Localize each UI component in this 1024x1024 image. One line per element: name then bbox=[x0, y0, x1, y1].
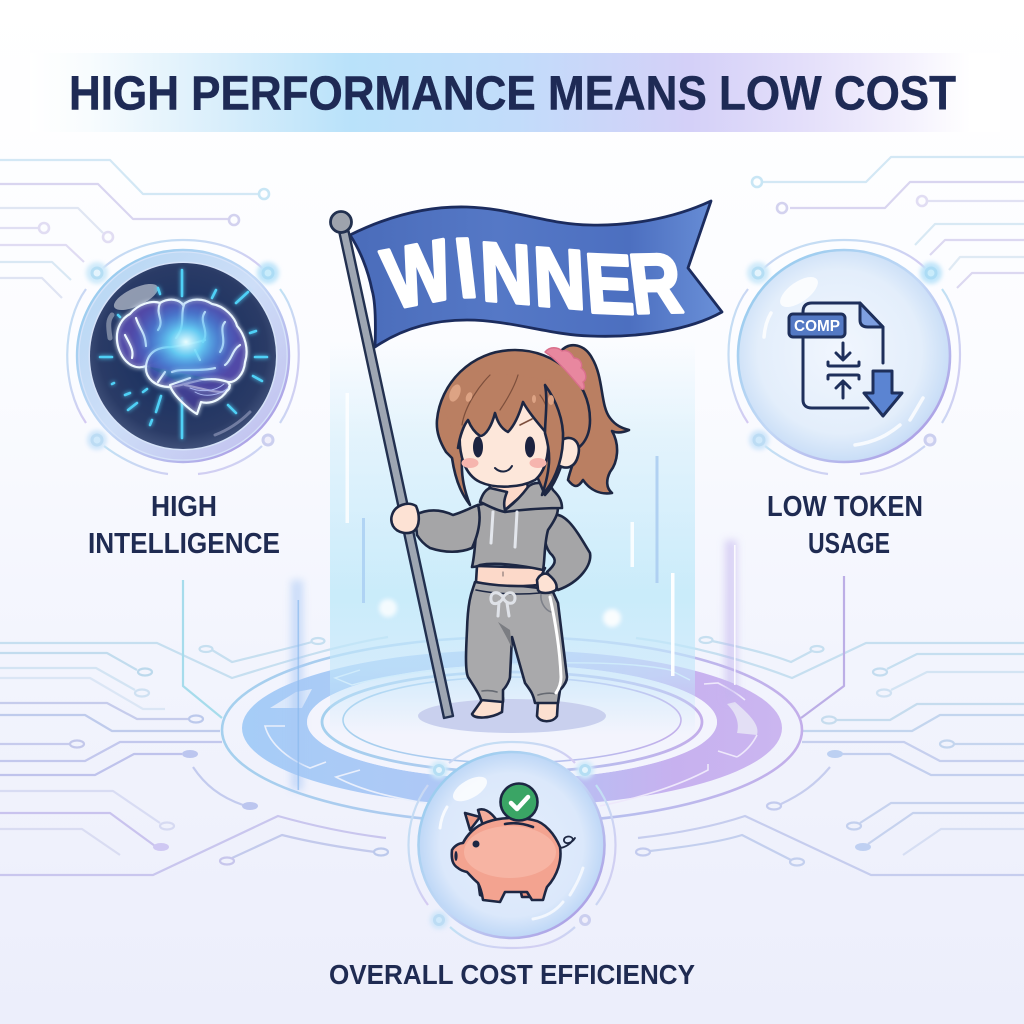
compress arrows bbox=[828, 343, 859, 398]
label: low token usage: LOW TOKEN bbox=[767, 491, 923, 523]
pig body bbox=[452, 818, 560, 902]
panel: low token usage bbox=[728, 240, 960, 474]
label: overall cost efficiency: OVERALL COST EFFICIENCY bbox=[329, 959, 695, 990]
connector nodes bbox=[86, 262, 279, 450]
nostril bbox=[454, 851, 458, 861]
brow bbox=[520, 419, 532, 425]
panel: high intelligence bbox=[67, 240, 299, 474]
bare midriff bbox=[476, 566, 545, 586]
coin slot bbox=[505, 823, 533, 827]
clenched hand bbox=[391, 504, 419, 533]
light column bbox=[330, 340, 695, 735]
circuit lines: top right bbox=[752, 157, 1024, 288]
sphere highlights bbox=[109, 279, 250, 435]
download arrow bbox=[864, 371, 902, 416]
ears bbox=[465, 813, 480, 830]
eyes bbox=[473, 436, 483, 458]
hair back bbox=[437, 350, 590, 505]
bubble highlights bbox=[440, 772, 583, 919]
blush bbox=[462, 458, 478, 468]
icon: energy rays bbox=[100, 270, 267, 438]
orbit arcs bbox=[728, 240, 960, 474]
glass rim bbox=[77, 250, 289, 462]
winner flag bbox=[330, 201, 722, 718]
hoodie torso bbox=[472, 500, 558, 570]
pole finial bbox=[330, 212, 352, 232]
hood bbox=[480, 483, 562, 512]
side lock bbox=[542, 385, 563, 495]
comp tag bbox=[789, 314, 845, 337]
title banner bbox=[30, 53, 1000, 132]
glass bubble bbox=[418, 752, 604, 938]
flag banner bbox=[350, 201, 722, 347]
navel bbox=[502, 572, 504, 576]
mouth bbox=[495, 466, 512, 472]
circuit lines: lower left bbox=[0, 580, 388, 875]
belly shading bbox=[464, 826, 556, 878]
sweatpants bbox=[466, 582, 567, 703]
dark sphere bbox=[90, 263, 276, 449]
face bbox=[460, 399, 548, 487]
right arm bbox=[544, 514, 590, 590]
icon: compressed file bbox=[789, 303, 902, 416]
glass bubble bbox=[738, 250, 950, 462]
circuit lines: top left bbox=[0, 160, 269, 298]
chibi girl character bbox=[391, 345, 629, 721]
title: HIGH PERFORMANCE MEANS LOW COST bbox=[69, 68, 956, 120]
icon: green check coin bbox=[500, 784, 538, 820]
connector nodes bbox=[430, 761, 594, 929]
connector nodes bbox=[747, 262, 942, 450]
hand on hip bbox=[537, 574, 557, 593]
label: high intelligence: HIGH bbox=[151, 491, 217, 523]
label: high intelligence: INTELLIGENCE bbox=[88, 528, 280, 560]
orbit arcs bbox=[408, 742, 616, 948]
orbit arcs bbox=[67, 240, 299, 474]
pants details bbox=[476, 590, 561, 695]
tag label: COMP bbox=[794, 318, 840, 335]
glowing platform bbox=[222, 637, 802, 823]
tail bbox=[559, 837, 575, 848]
flag text: WINNER bbox=[374, 222, 687, 332]
inner rim band bbox=[84, 257, 282, 455]
neck bbox=[488, 480, 528, 510]
feet bbox=[472, 698, 503, 718]
label: low token usage: USAGE bbox=[808, 528, 890, 560]
bubble highlights bbox=[764, 271, 923, 445]
bangs bbox=[445, 370, 552, 448]
scrunchie bbox=[545, 348, 586, 389]
brain glow bbox=[130, 296, 242, 388]
light streaks and glow orbs bbox=[291, 393, 737, 790]
back legs bbox=[478, 880, 490, 898]
left sleeve bbox=[415, 505, 480, 552]
icon: brain bbox=[117, 300, 247, 414]
icon: piggy bank bbox=[452, 809, 575, 902]
panel: overall cost efficiency bbox=[408, 742, 616, 948]
ear bbox=[558, 438, 579, 468]
hoodie drawstrings bbox=[491, 512, 517, 547]
ponytail bbox=[560, 345, 629, 493]
flag pole bbox=[340, 231, 453, 718]
circuit lines: lower right bbox=[636, 576, 1024, 875]
eye bbox=[472, 840, 480, 848]
hair highlights bbox=[447, 383, 554, 405]
ground shadow bbox=[418, 699, 606, 733]
